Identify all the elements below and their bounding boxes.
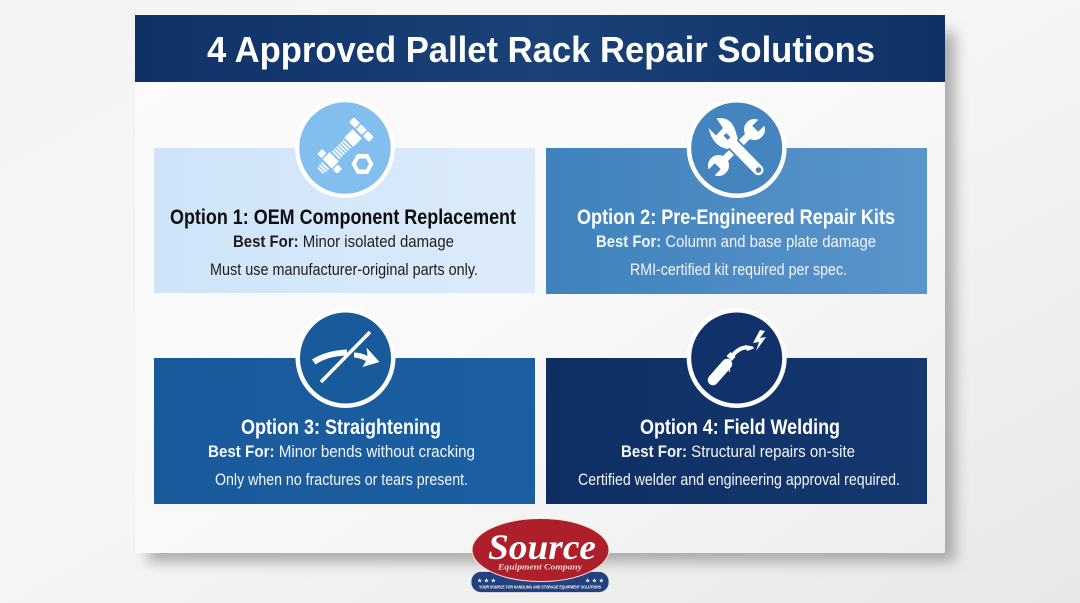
logo: Source Equipment Company: [471, 518, 609, 592]
logo: Source Equipment Company: ★★★: [585, 578, 604, 584]
heading: Option 3: Straightening: [241, 416, 441, 439]
heading: Option 4: Field Welding: [640, 416, 840, 439]
best for: Best For: Minor bends without cracking: [208, 443, 475, 461]
note: Certified welder and engineering approval required.: [578, 471, 900, 489]
icon: crossed wrenches: [687, 98, 787, 198]
logo: Source Equipment Company: ★★★: [477, 578, 496, 584]
white panel: [135, 15, 945, 553]
panel: option 1: [154, 98, 535, 293]
panel shadow: [148, 32, 955, 562]
logo: Source Equipment Company: YOUR SOURCE FOR HANDLING AND STORAGE EQUIPMENT SOLUTIONS: [479, 584, 601, 590]
best for: Best For: Column and base plate damage: [596, 233, 876, 251]
note: Must use manufacturer-original parts only.: [210, 261, 478, 279]
icon: welding torch: [687, 308, 787, 408]
heading: Option 2: Pre-Engineered Repair Kits: [577, 206, 895, 229]
icon: bolt and nut: [295, 98, 395, 198]
logo: Source Equipment Company: Equipment Company: [497, 562, 582, 572]
icon: straightening arrow: [296, 308, 396, 408]
panel: option 3: [154, 308, 535, 504]
logo: Source Equipment Company: Source: [488, 527, 596, 567]
note: RMI-certified kit required per spec.: [630, 261, 847, 279]
title: 4 Approved Pallet Rack Repair Solutions: [207, 29, 875, 70]
panel: option 4: [546, 308, 927, 504]
best for: Best For: Minor isolated damage: [233, 233, 454, 251]
best for: Best For: Structural repairs on-site: [621, 443, 855, 461]
heading: Option 1: OEM Component Replacement: [170, 206, 516, 229]
panel: option 2: [546, 98, 927, 294]
note: Only when no fractures or tears present.: [215, 471, 468, 489]
title banner: [135, 15, 945, 82]
